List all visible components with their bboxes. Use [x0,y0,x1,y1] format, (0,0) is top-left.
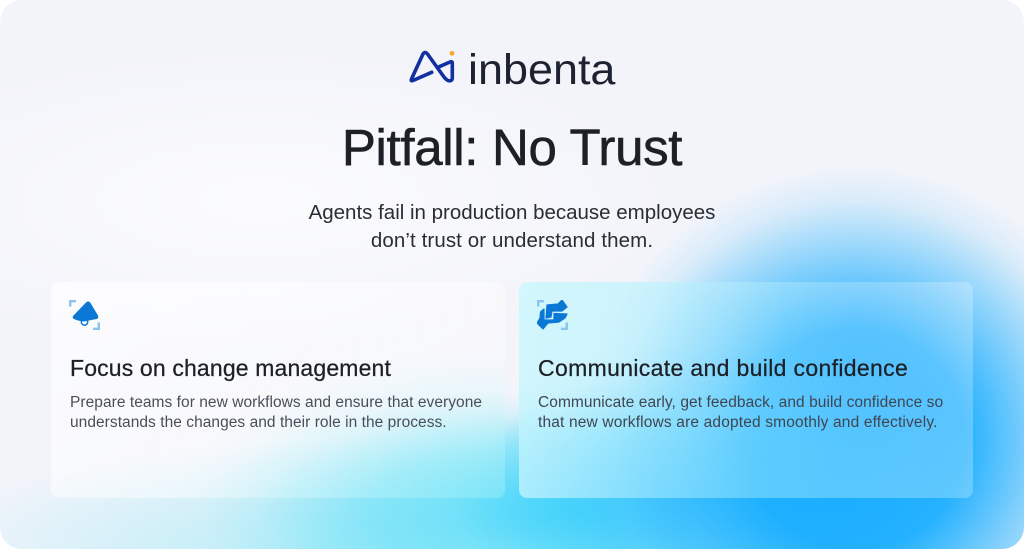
body text: Communicate early, get feedback, and build confidence so [538,394,943,411]
logo [409,46,616,94]
icon: logo mark [409,50,454,83]
title: Pitfall: No Trust [342,119,682,176]
subtitle: Agents fail in production because employees [309,201,715,224]
subtitle [308,201,715,252]
icon: handshake [537,300,568,330]
icon: megaphone [69,300,100,330]
body text: that new workflows are adopted smoothly and effectively. [538,414,938,431]
body text [538,394,943,431]
body text [70,394,482,431]
subtitle: don’t trust or understand them. [371,229,653,252]
body text: Prepare teams for new workflows and ensure that everyone [70,394,482,411]
panel: change management [51,282,505,498]
panel: communicate [519,282,973,498]
heading: Focus on change management [70,355,391,381]
wordmark: inbenta [468,46,615,94]
heading: Communicate and build confidence [538,355,908,381]
body text: understands the changes and their role in the process. [70,414,447,431]
